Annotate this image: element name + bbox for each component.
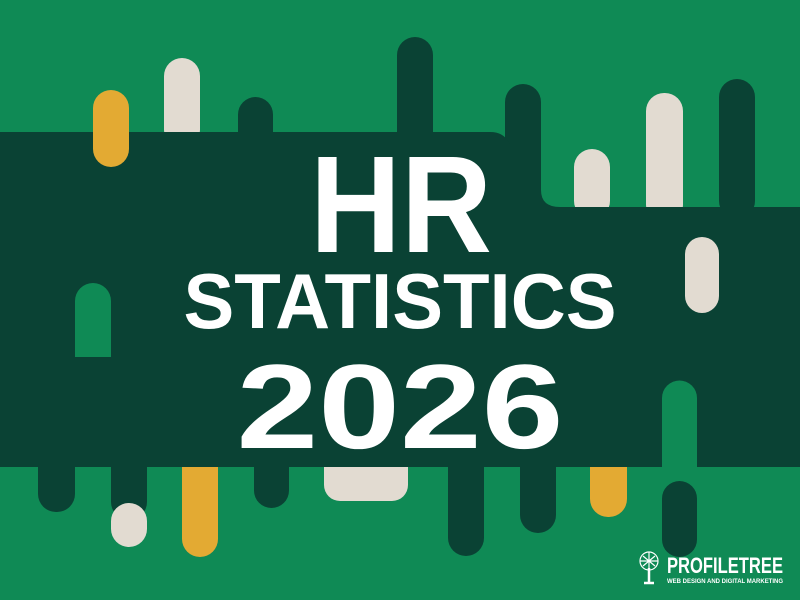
bars below band	[38, 430, 697, 557]
icon: tree	[640, 552, 658, 583]
bars inside band	[75, 90, 719, 467]
title	[184, 128, 616, 474]
bars above band	[164, 37, 755, 224]
logo	[640, 552, 783, 585]
title: STATISTICS	[184, 257, 616, 345]
logo: WEB DESIGN AND DIGITAL MARKETING	[667, 579, 783, 585]
dark band	[0, 132, 800, 467]
title: HR	[310, 128, 492, 282]
title: 2026	[236, 340, 564, 474]
